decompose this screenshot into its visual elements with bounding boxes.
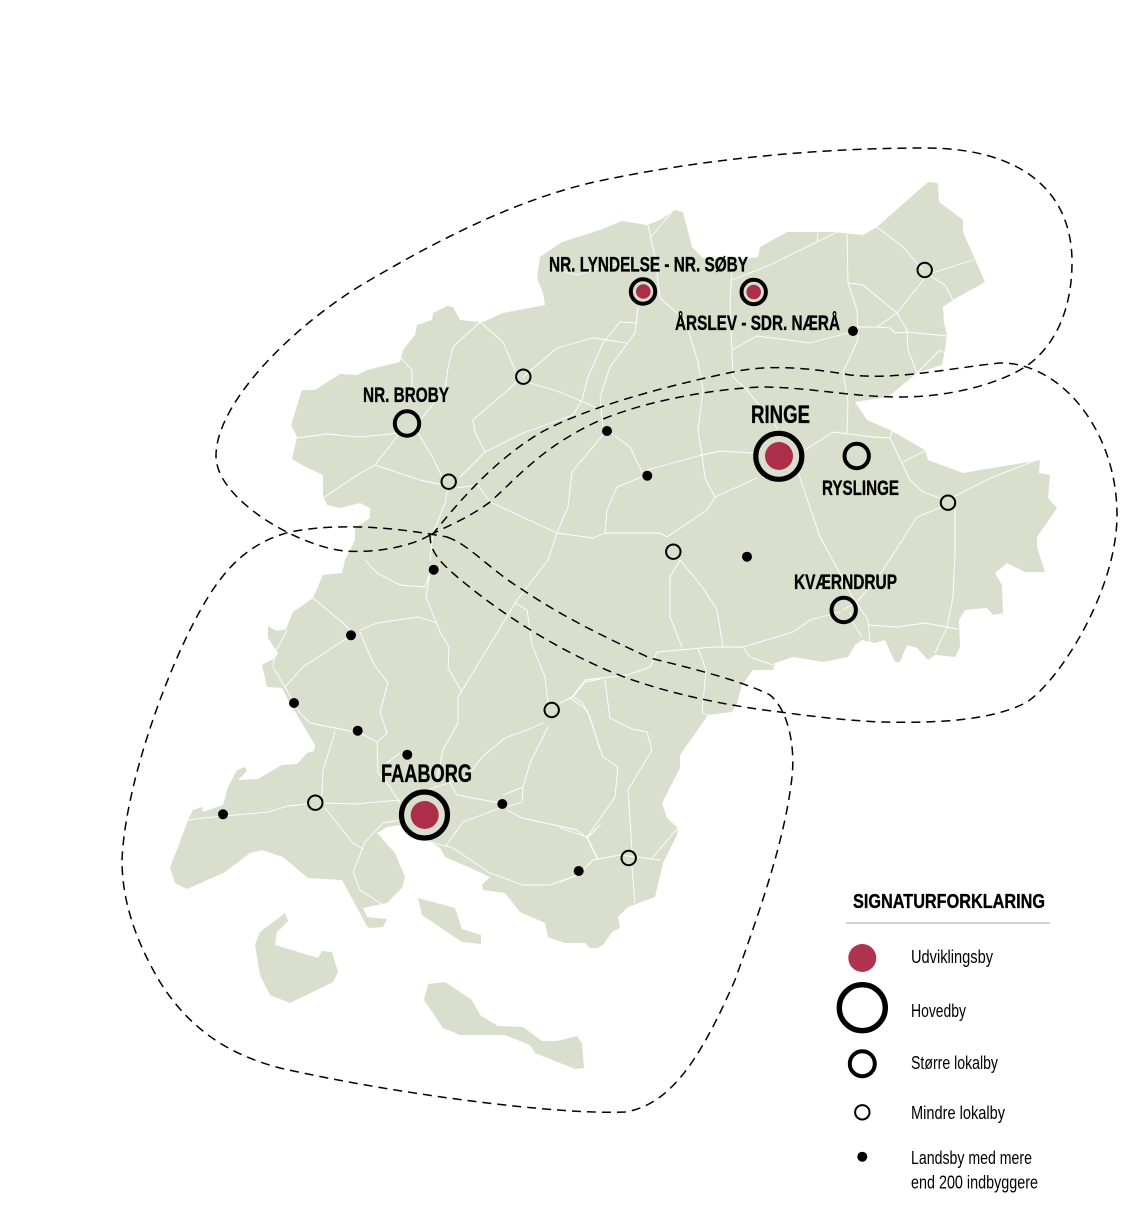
marker: Nr. Lyndelse - Nr. Søby — [631, 279, 655, 304]
legend item: Hovedby — [839, 985, 966, 1031]
legend heading: SIGNATURFORKLARING — [853, 890, 1045, 913]
road network — [188, 212, 1037, 905]
legend item: Større lokalby: Større lokalby — [911, 1053, 998, 1073]
land: western island — [255, 913, 338, 1003]
map: land masses — [170, 182, 1057, 1069]
legend item: Landsby med mere end 200 indbyggere — [857, 1148, 1038, 1192]
legend item: Udviklingsby — [848, 944, 993, 972]
markers: mindre lokalby rings — [308, 263, 955, 865]
markers: større lokalby rings — [395, 411, 869, 622]
legend item: Landsby med mere end 200 indbyggere: end 200 indbyggere — [911, 1172, 1038, 1192]
label: Nr. Broby: NR. BROBY — [363, 383, 449, 407]
label: Faaborg: FAABORG — [381, 760, 472, 788]
label: Ringe: RINGE — [751, 401, 810, 429]
legend item: Mindre lokalby: Mindre lokalby — [911, 1103, 1005, 1123]
marker: Faaborg — [402, 792, 448, 838]
dashed boundary: southern area — [122, 527, 793, 1112]
legend item: Mindre lokalby — [855, 1103, 1005, 1123]
legend item: Udviklingsby: Udviklingsby — [911, 947, 993, 967]
dashed boundary: northern area — [216, 148, 1072, 551]
legend item: Hovedby: Hovedby — [911, 1001, 966, 1021]
label: Ryslinge: RYSLINGE — [822, 476, 899, 500]
legend item: Landsby med mere end 200 indbyggere: Landsby med mere — [911, 1148, 1032, 1168]
marker: Årslev - Sdr. Nærå — [742, 280, 766, 304]
dashed boundary: eastern area — [430, 363, 1117, 722]
land: southern island — [424, 982, 584, 1069]
label: Årslev - Sdr. Nærå: ÅRSLEV - SDR. NÆRÅ — [675, 309, 840, 335]
label: Nr. Lyndelse - Nr. Søby: NR. LYNDELSE - NR. SØBY — [549, 252, 748, 276]
label: Kværndrup: KVÆRNDRUP — [794, 570, 897, 594]
land: main island — [170, 182, 1057, 948]
marker: Ringe — [756, 433, 802, 479]
land: small island — [418, 898, 481, 944]
markers: landsby dots — [218, 326, 858, 876]
legend panel — [839, 890, 1050, 1192]
legend item: Større lokalby — [850, 1051, 998, 1076]
